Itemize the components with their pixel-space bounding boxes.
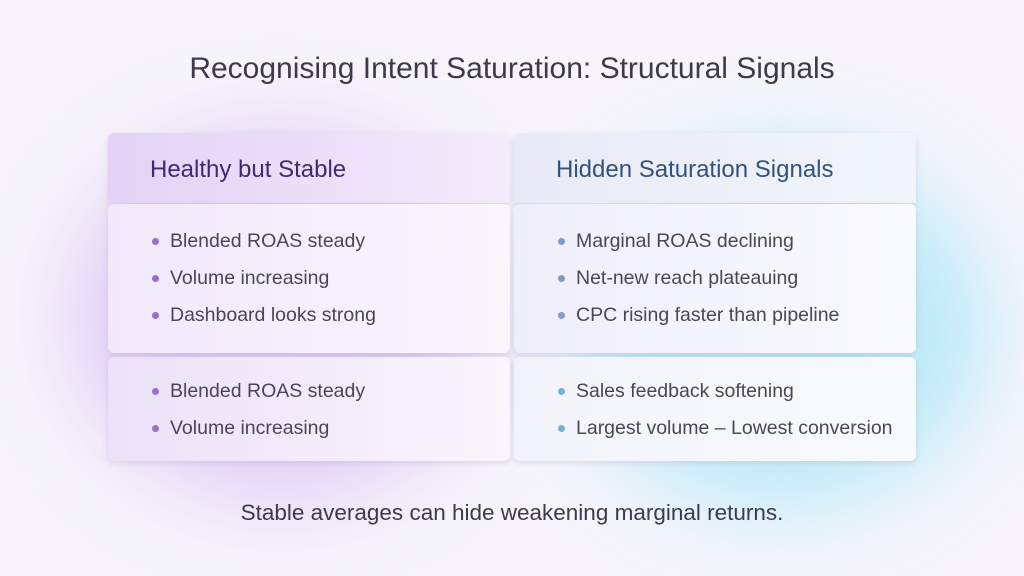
right header: Hidden Saturation Signals [556, 156, 834, 183]
left header: Healthy but Stable [150, 156, 346, 183]
right body list [514, 204, 916, 353]
left body list [108, 204, 510, 353]
right body list: CPC rising faster than pipeline [576, 304, 839, 326]
left body list: Dashboard looks strong [170, 304, 376, 326]
right bottom list: Sales feedback softening [576, 380, 794, 402]
right header [514, 133, 916, 203]
panel: healthy but stable [106, 133, 512, 464]
title: Recognising Intent Saturation: Structural Signals [189, 52, 835, 85]
left bottom list [108, 357, 510, 461]
left bottom list: Blended ROAS steady [170, 380, 365, 402]
left body list: Blended ROAS steady [170, 230, 365, 252]
left header [108, 133, 510, 203]
right bottom list [514, 357, 916, 461]
left body list: Volume increasing [170, 267, 329, 289]
right body list: Net-new reach plateauing [576, 267, 798, 289]
footer caption: Stable averages can hide weakening marginal returns. [241, 500, 783, 525]
right body list: Marginal ROAS declining [576, 230, 794, 252]
panel: hidden saturation signals [512, 133, 918, 464]
left bottom list: Volume increasing [170, 417, 329, 439]
right bottom list: Largest volume – Lowest conversion [576, 417, 893, 439]
